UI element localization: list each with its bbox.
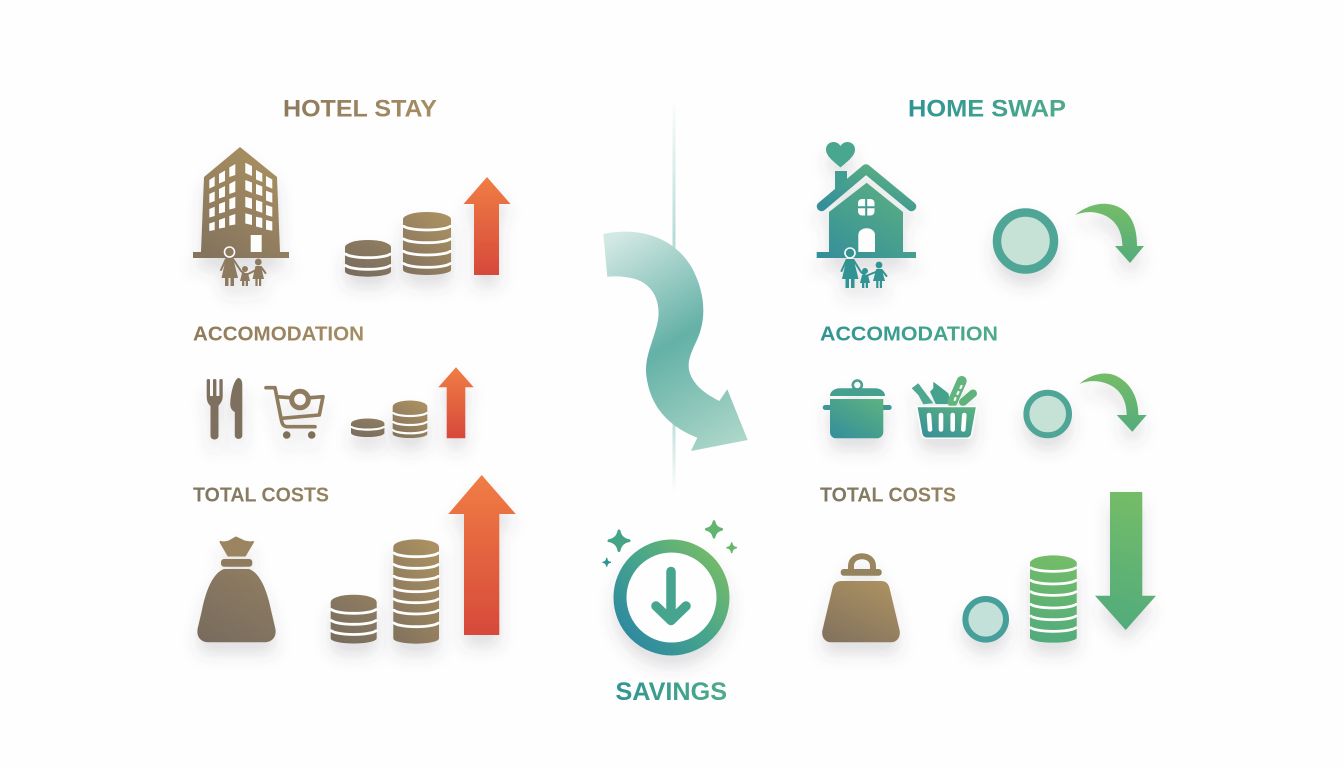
curved arrow: hotel to home swap [603,232,748,451]
icon: cooking pot [823,380,892,438]
icon: green coin stack [1030,555,1077,643]
icon: small coin stack [345,240,391,277]
icon: house with heart and family [817,142,916,288]
icon: coin stack total small [331,595,377,644]
arrow: accommodation cost up [464,177,510,275]
icon: money bag [197,538,276,642]
icon: single coin [351,419,384,437]
arrow: food cost up [438,367,474,438]
panel: home swap [817,96,1156,643]
center divider line [672,98,676,493]
icon: single coin small [965,599,1006,640]
icon: tall coin stack [403,212,451,275]
arrow: total cost down [1095,492,1156,630]
label: savings: SAVINGS [616,678,727,706]
label: total costs: TOTAL COSTS [193,484,329,506]
icon: sparkles [603,522,736,566]
icon: savings ring with down arrow [620,546,723,649]
label: total costs: TOTAL COSTS [820,484,956,506]
icon: weight-shaped bag [822,556,900,642]
icon: grocery basket [912,381,977,438]
label: accomodation: ACCOMODATION [820,324,998,346]
icon: single coin medium [1026,393,1069,435]
arrow: curved down [1075,204,1144,263]
arrow: total cost up [448,475,516,635]
icon: coin stack total tall [393,539,439,644]
icon: single coin large [997,212,1054,270]
heading: hotel stay: HOTEL STAY [283,96,437,122]
icon: fork [207,379,223,440]
icon: hotel building with family [193,147,289,286]
panel: savings [603,522,736,706]
icon: medium coin stack [393,400,427,438]
panel: hotel stay [193,96,516,644]
arrow: curved down small [1079,373,1147,432]
heading: home swap: HOME SWAP [908,96,1066,122]
icon: shopping cart [266,388,323,439]
label: accomodation: ACCOMODATION [193,324,364,346]
icon: knife [230,378,242,439]
